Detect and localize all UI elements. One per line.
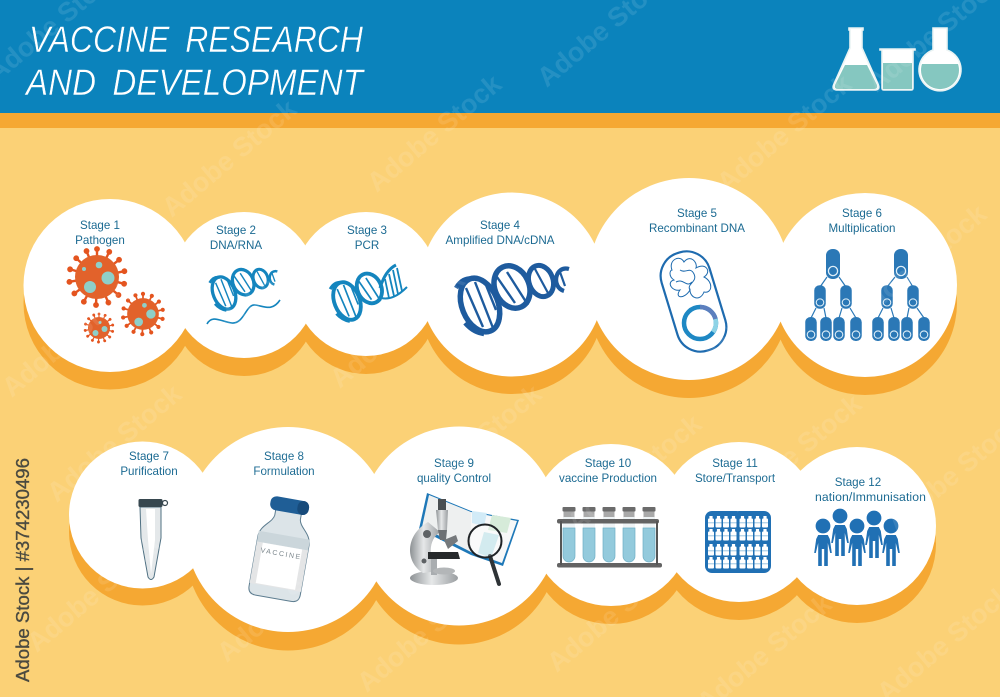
panel: stage 11 store/transport: [659, 442, 819, 602]
label: stage 7: Stage 7: [129, 450, 169, 463]
panel: stage 12 vaccination/immunisation: [796, 447, 936, 605]
label: stage 6: Stage 6: [842, 207, 882, 220]
watermark overlay: Adobe Stock: [41, 378, 188, 508]
icon: group of people: [814, 509, 900, 566]
watermark overlay: Adobe Stock: [324, 264, 471, 394]
icon: cell division trees: [805, 249, 930, 341]
watermark overlay: Adobe Stock: [156, 93, 303, 223]
shadows behind the stage circles: [24, 196, 957, 650]
icon: open book, microscope and magnifier: [410, 493, 519, 585]
label: stage 1: Stage 1: [80, 219, 120, 232]
watermark overlay: Adobe Stock: [21, 528, 168, 658]
title: [24, 19, 365, 103]
label: stage 1: Pathogen: [75, 234, 125, 247]
icon: vial tray: [705, 511, 771, 573]
watermark overlay: Adobe Stock: [361, 68, 508, 198]
title: AND DEVELOPMENT: [24, 62, 365, 103]
watermark overlay: Adobe Stock: [351, 568, 498, 697]
label: stage 5: Stage 5: [677, 207, 717, 220]
watermark overlay: Adobe Stock: [681, 253, 828, 383]
icon: virus cluster: [67, 247, 165, 343]
panel: stage 3 PCR: [294, 212, 438, 356]
label: stage 3: PCR: [355, 239, 379, 252]
watermark overlay: Adobe Stock: [561, 408, 708, 538]
panel: stage 4 amplified DNA/cDNA: [420, 192, 604, 376]
label: stage 2: DNA/RNA: [210, 239, 262, 252]
label: stage 12: Stage 12: [835, 476, 881, 489]
label: stage 11: Store/Transport: [695, 472, 776, 485]
panel: stage 2 DNA/RNA: [171, 212, 317, 358]
watermark overlay: Adobe Stock: [711, 68, 858, 198]
header band: [0, 0, 1000, 128]
icon: DNA and RNA strands: [207, 266, 280, 324]
label: stage 2: Stage 2: [216, 224, 256, 237]
label: stage 10: vaccine Production: [559, 472, 657, 485]
watermark overlay: Adobe Stock: [521, 228, 668, 358]
panel: stage 10 vaccine production: [530, 444, 692, 606]
watermark overlay: Adobe Stock: [401, 378, 548, 508]
watermark overlay: Adobe Stock: [199, 218, 346, 348]
label: stage 10: Stage 10: [585, 457, 631, 470]
panel: stage 9 quality control: [360, 426, 558, 626]
label: stage 5: Recombinant DNA: [649, 222, 745, 235]
panel: stage 8 formulation: [186, 427, 390, 632]
label: stage 8: Stage 8: [264, 450, 304, 463]
label: stage 6: Multiplication: [828, 222, 896, 235]
panel: stage 7 purification: [69, 442, 216, 588]
panel: stage 1 pathogen: [24, 199, 196, 372]
icon: DNA double helix: [453, 260, 569, 338]
icon: test tube rack: [557, 507, 662, 568]
watermark overlay: Adobe Stock: [171, 428, 318, 558]
stock image id, vertical text: Adobe Stock | #374230496: [12, 458, 33, 682]
icon: vaccine vial: VACCINE: [260, 547, 302, 561]
panel: stage 6 multiplication: [773, 193, 957, 377]
watermark overlay: Adobe Stock: [211, 538, 358, 668]
label: stage 9: Stage 9: [434, 457, 474, 470]
title: VACCINE RESEARCH: [29, 19, 363, 60]
watermark overlay: Adobe Stock: [721, 388, 868, 518]
panel: stage 5 recombinant DNA: [588, 178, 790, 380]
icon: DNA replication fork: [328, 265, 407, 324]
label: stage 3: Stage 3: [347, 224, 387, 237]
watermark overlay: Adobe Stock: [0, 273, 143, 403]
label: stage 7: Purification: [120, 465, 178, 478]
icon: bacterium with plasmid: [655, 245, 732, 358]
icon: vaccine vial: [248, 494, 316, 603]
label: vaccination/immunisation (clipped at left): Vaccination/Immunisation: [786, 490, 926, 504]
icon: laboratory flasks: [833, 28, 961, 91]
label: stage 4: Amplified DNA/cDNA: [446, 234, 555, 247]
label: stage 8: Formulation: [253, 465, 315, 478]
watermark overlay: Adobe Stock: [846, 198, 993, 328]
label: stage 11: Stage 11: [712, 457, 758, 470]
label: stage 9: quality Control: [417, 472, 491, 485]
label: stage 4: Stage 4: [480, 219, 520, 232]
watermark overlay: Adobe Stock: [541, 548, 688, 678]
icon: microcentrifuge tube: [138, 499, 168, 580]
